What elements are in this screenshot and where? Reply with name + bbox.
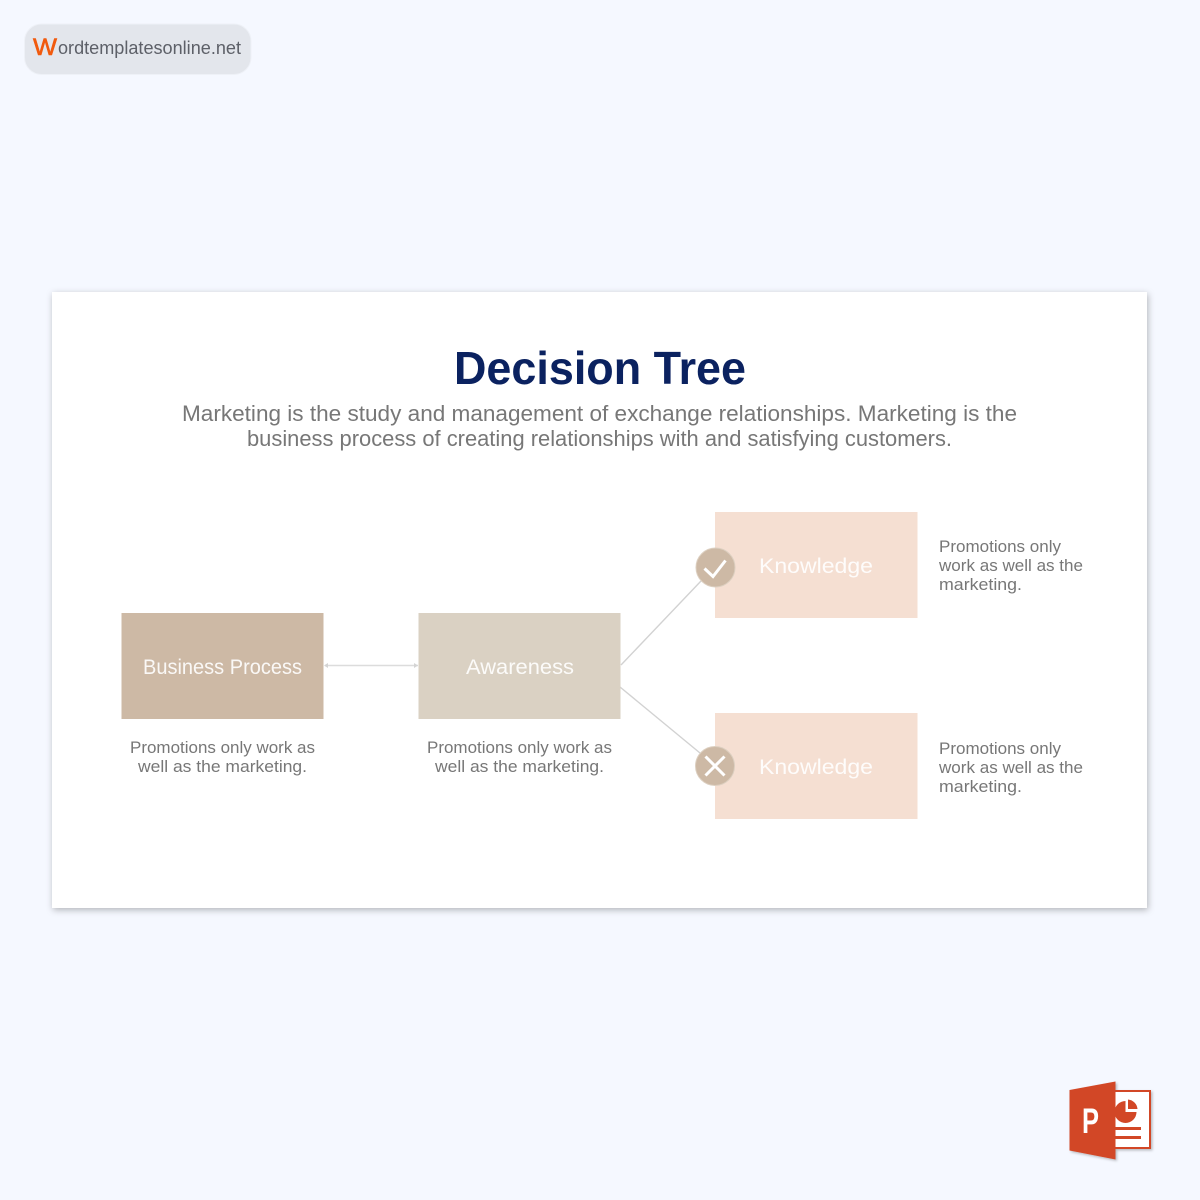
- text: bottom Knowledge description: work as well as the: [938, 759, 1083, 777]
- text: top Knowledge description: [938, 538, 1083, 594]
- box: Knowledge bottom: Knowledge: [759, 756, 873, 779]
- connector: awareness to cross: [620, 687, 700, 753]
- box: Awareness: Awareness: [466, 656, 574, 679]
- logo badge: Wordtemplatesonline.net: [24, 24, 251, 74]
- title: Decision Tree: [454, 342, 746, 394]
- text: Awareness description: Promotions only work as: [427, 739, 612, 757]
- box: Business Process: [122, 613, 324, 719]
- box: Knowledge top: [715, 512, 918, 618]
- text: Business Process description: well as the marketing.: [137, 758, 307, 776]
- panel: decision tree slide: [52, 292, 1147, 908]
- box: Knowledge bottom: [715, 713, 918, 819]
- text: top Knowledge description: Promotions only: [939, 538, 1062, 556]
- icon: cross mark: [696, 746, 734, 786]
- logo badge: Wordtemplatesonline.net: W: [33, 34, 57, 61]
- text: top Knowledge description: marketing.: [939, 576, 1022, 594]
- subtitle text: Marketing is the study and management of exchange relationships. Marketing is the: [182, 401, 1017, 426]
- text: bottom Knowledge description: [938, 740, 1083, 796]
- text: Business Process description: Promotions only work as: [130, 739, 315, 757]
- text: Awareness description: well as the marketing.: [434, 758, 604, 776]
- subtitle text: business process of creating relationships with and satisfying customers.: [247, 426, 952, 451]
- box: Knowledge top: Knowledge: [759, 555, 873, 578]
- box: Awareness: [418, 613, 620, 719]
- connector: awareness to check: [621, 581, 701, 665]
- box: Business Process: Business Process: [143, 656, 302, 679]
- subtitle text: [182, 401, 1017, 451]
- icon: PowerPoint logo: [1070, 1082, 1150, 1160]
- text: bottom Knowledge description: marketing.: [939, 778, 1022, 796]
- text: Business Process description: [130, 739, 315, 776]
- arrow: awareness to business process: [324, 663, 418, 668]
- text: Awareness description: [427, 739, 612, 776]
- icon: check mark: [696, 548, 735, 587]
- icon: PowerPoint logo: P: [1082, 1102, 1099, 1141]
- logo badge: Wordtemplatesonline.net: ordtemplatesonline.net: [58, 37, 241, 58]
- text: top Knowledge description: work as well as the: [938, 557, 1083, 575]
- text: bottom Knowledge description: Promotions only: [939, 740, 1062, 758]
